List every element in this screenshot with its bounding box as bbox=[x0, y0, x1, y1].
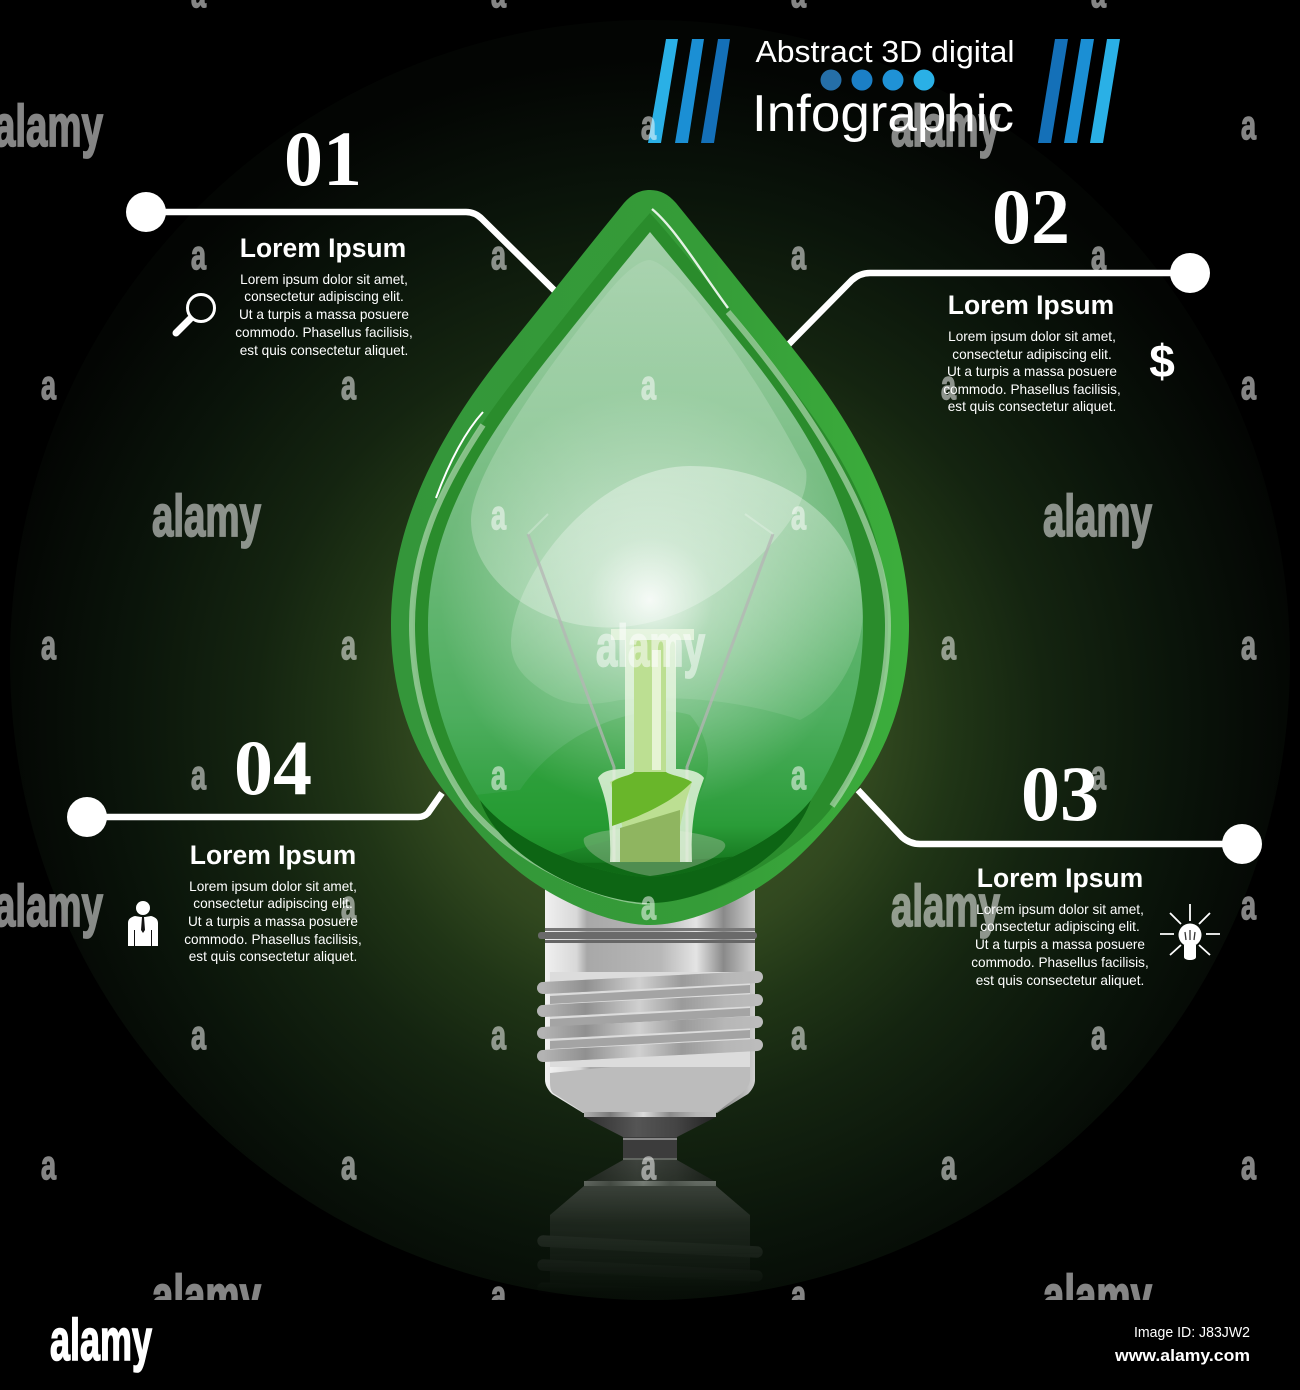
watermarks: alamy bbox=[891, 94, 1000, 159]
filament stem bbox=[598, 629, 704, 862]
watermarks: a bbox=[341, 882, 357, 928]
number 02: 02 bbox=[992, 173, 1070, 260]
body 03: consectetur adipiscing elit. bbox=[980, 919, 1140, 934]
watermarks: a bbox=[1091, 752, 1107, 798]
glass bbox=[428, 232, 863, 877]
body 03: Ut a turpis a massa posuere bbox=[975, 937, 1145, 952]
icon: light bulb bbox=[1160, 904, 1220, 960]
number 01: 01 bbox=[284, 115, 362, 202]
body 01: Lorem ipsum dolor sit amet, bbox=[240, 272, 408, 287]
icon: dollar: $ bbox=[1149, 335, 1175, 387]
heading line 2: Infographic bbox=[752, 85, 1014, 143]
watermarks: a bbox=[791, 232, 807, 278]
bulb base reflection bbox=[537, 1158, 762, 1273]
body 03: Lorem ipsum dolor sit amet, bbox=[976, 902, 1144, 917]
body 03: est quis consectetur aliquet. bbox=[976, 973, 1144, 988]
body 01: Ut a turpis a massa posuere bbox=[239, 307, 409, 322]
body 02: Lorem ipsum dolor sit amet, bbox=[948, 329, 1116, 344]
body 01: commodo. Phasellus facilisis, bbox=[235, 325, 413, 340]
icon: businessman bbox=[128, 901, 158, 946]
watermarks: a bbox=[341, 622, 357, 668]
body 01 bbox=[235, 272, 413, 358]
base puddle bbox=[584, 828, 725, 876]
footer bbox=[50, 1308, 1250, 1373]
watermarks: a bbox=[941, 362, 957, 408]
watermarks: a bbox=[491, 1272, 507, 1318]
image id: Image ID: J83JW2 bbox=[1134, 1324, 1250, 1341]
panel 02 bbox=[943, 173, 1175, 414]
heading 02: Lorem Ipsum bbox=[948, 290, 1114, 320]
watermarks: a bbox=[1241, 1142, 1257, 1188]
filament top loop bbox=[528, 514, 773, 534]
watermarks: a bbox=[941, 1142, 957, 1188]
icon: magnifier bbox=[176, 294, 214, 333]
number 04: 04 bbox=[234, 724, 312, 811]
connector 04 bbox=[67, 793, 442, 837]
watermarks: a bbox=[641, 882, 657, 928]
title bbox=[648, 34, 1120, 143]
outer drop band bbox=[391, 190, 909, 925]
watermarks: a bbox=[341, 1142, 357, 1188]
connector 02 bbox=[788, 253, 1210, 345]
green drop bulb bbox=[391, 190, 909, 925]
inner dark band bbox=[413, 213, 888, 903]
watermarks: a bbox=[1241, 622, 1257, 668]
watermarks: a bbox=[791, 1272, 807, 1318]
left stripes bbox=[648, 39, 730, 143]
watermarks: a bbox=[791, 752, 807, 798]
connector lines bbox=[67, 192, 1262, 864]
body 04: commodo. Phasellus facilisis, bbox=[184, 932, 362, 947]
watermarks: a bbox=[41, 1142, 57, 1188]
body 01: est quis consectetur aliquet. bbox=[240, 343, 408, 358]
panel 03 bbox=[971, 750, 1220, 988]
body 02 bbox=[943, 329, 1121, 414]
watermarks: alamy bbox=[152, 484, 261, 549]
dots bbox=[820, 70, 934, 90]
heading 01: Lorem Ipsum bbox=[240, 233, 406, 263]
watermarks: a bbox=[41, 622, 57, 668]
watermarks: a bbox=[1241, 102, 1257, 148]
body 03: commodo. Phasellus facilisis, bbox=[971, 955, 1149, 970]
watermarks: alamy bbox=[152, 1264, 261, 1329]
upper highlight bbox=[471, 260, 806, 627]
watermarks: a bbox=[341, 362, 357, 408]
website: www.alamy.com bbox=[1114, 1346, 1250, 1365]
body 02: Ut a turpis a massa posuere bbox=[947, 364, 1117, 379]
watermarks: a bbox=[491, 492, 507, 538]
body 04: Ut a turpis a massa posuere bbox=[188, 914, 358, 929]
body 04: est quis consectetur aliquet. bbox=[189, 949, 357, 964]
heading 03: Lorem Ipsum bbox=[977, 863, 1143, 893]
watermarks: alamy bbox=[1043, 484, 1152, 549]
watermarks: a bbox=[491, 752, 507, 798]
watermarks: a bbox=[641, 102, 657, 148]
connector 03 bbox=[858, 790, 1262, 864]
body 02: est quis consectetur aliquet. bbox=[948, 399, 1116, 414]
right stripes bbox=[1038, 39, 1120, 143]
number 03: 03 bbox=[1021, 750, 1099, 837]
watermarks: a bbox=[791, 492, 807, 538]
watermarks: alamy bbox=[596, 614, 705, 679]
bulb screw base bbox=[538, 885, 757, 1158]
lower highlight bbox=[511, 466, 863, 720]
body 04: Lorem ipsum dolor sit amet, bbox=[189, 879, 357, 894]
watermarks: a bbox=[191, 1012, 207, 1058]
heading line 1: Abstract 3D digital bbox=[756, 34, 1014, 69]
watermarks: a bbox=[1241, 362, 1257, 408]
panel 01 bbox=[176, 115, 413, 358]
watermarks: a bbox=[1091, 1012, 1107, 1058]
watermarks: a bbox=[1241, 882, 1257, 928]
body 03 bbox=[971, 902, 1149, 988]
watermarks: a bbox=[641, 362, 657, 408]
watermarks: a bbox=[941, 622, 957, 668]
body 04 bbox=[184, 879, 362, 964]
watermarks: a bbox=[641, 1142, 657, 1188]
watermarks: a bbox=[41, 362, 57, 408]
body 04: consectetur adipiscing elit. bbox=[193, 896, 353, 911]
heading 04: Lorem Ipsum bbox=[190, 840, 356, 870]
rim highlights bbox=[412, 312, 888, 902]
body 02: consectetur adipiscing elit. bbox=[952, 347, 1112, 362]
panel 04 bbox=[128, 724, 362, 964]
right glint bbox=[652, 209, 728, 308]
glass details bbox=[459, 260, 863, 876]
watermarks: a bbox=[791, 1012, 807, 1058]
watermarks: alamy bbox=[891, 874, 1000, 939]
watermarks: a bbox=[191, 752, 207, 798]
footer logo: alamy bbox=[50, 1308, 152, 1373]
watermarks: a bbox=[491, 1012, 507, 1058]
connector 01 bbox=[126, 192, 556, 292]
watermarks: a bbox=[191, 232, 207, 278]
support wires bbox=[528, 534, 773, 862]
dark lower band bbox=[480, 800, 811, 903]
watermarks: a bbox=[1091, 232, 1107, 278]
left glint bbox=[436, 412, 483, 498]
body 02: commodo. Phasellus facilisis, bbox=[943, 382, 1121, 397]
body 01: consectetur adipiscing elit. bbox=[244, 289, 404, 304]
watermarks: alamy bbox=[1043, 1264, 1152, 1329]
watermarks: a bbox=[491, 232, 507, 278]
